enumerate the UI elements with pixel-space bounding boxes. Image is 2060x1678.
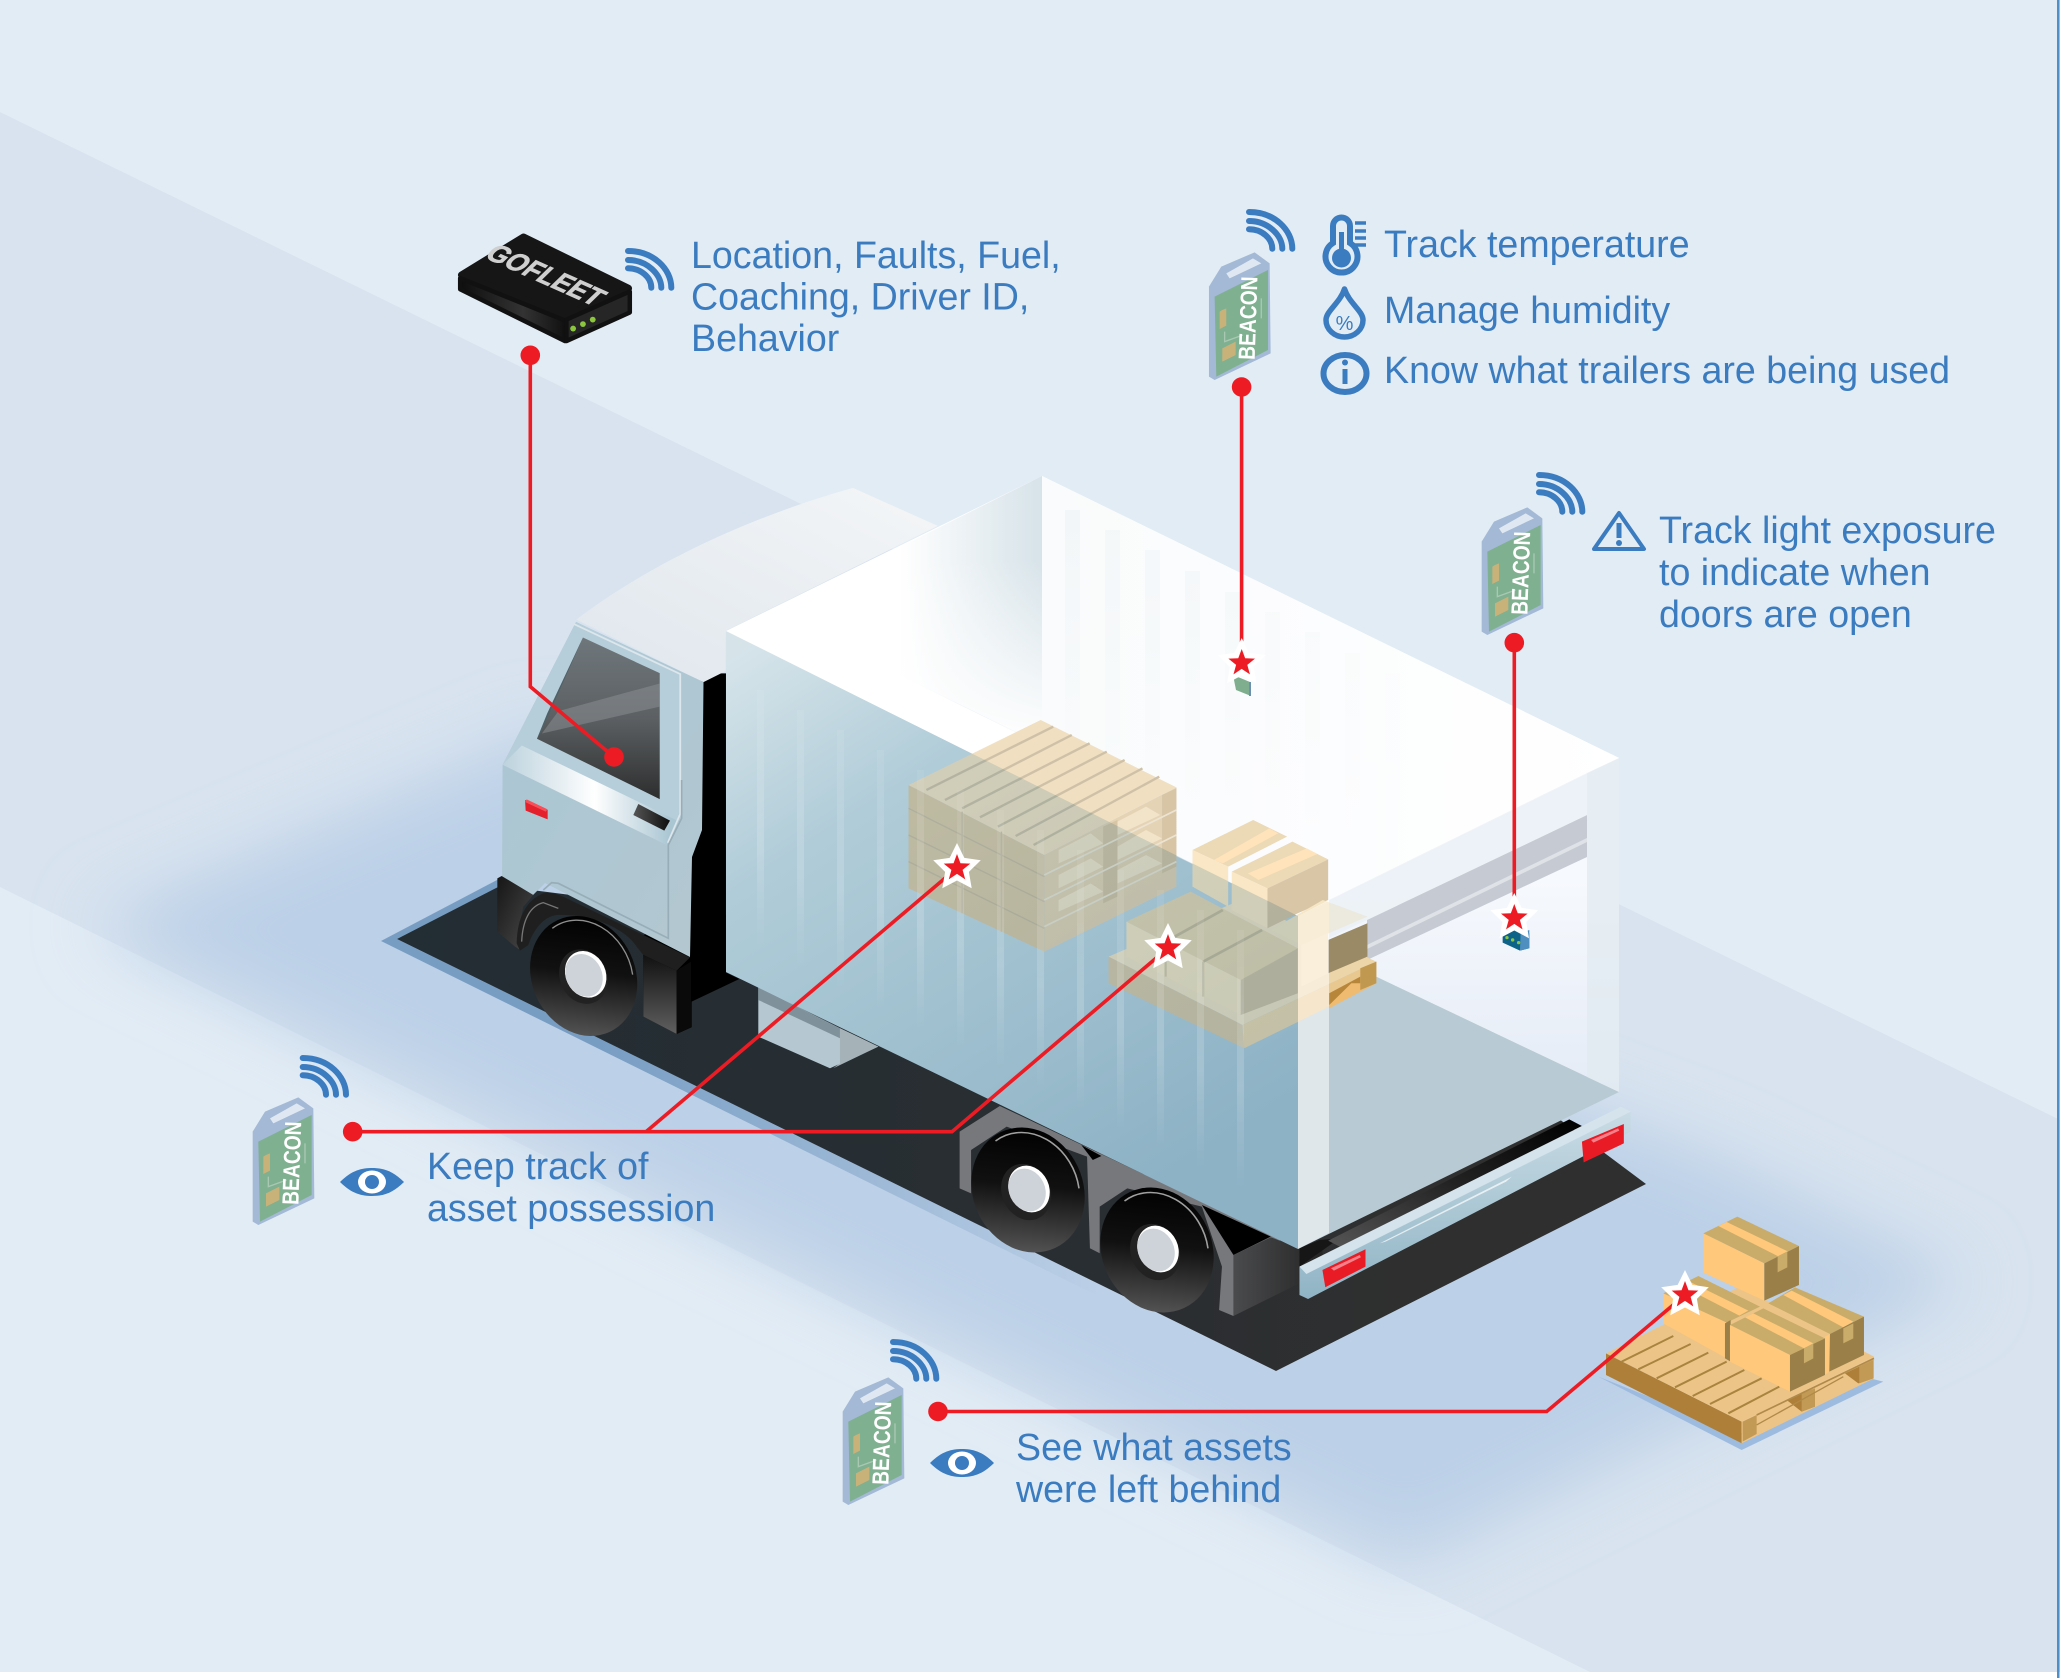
side wall stripes <box>757 690 1244 1190</box>
small device on door <box>1503 927 1529 951</box>
rear door frame <box>1298 758 1619 1249</box>
line: left behind <box>938 1295 1685 1412</box>
icon: GoFleet device <box>460 237 630 341</box>
icon: beacon left <box>253 1097 314 1225</box>
icon: beacon left: BEACON <box>277 1121 306 1205</box>
right edge line <box>2057 0 2060 1678</box>
text: device features: Behavior <box>691 317 839 359</box>
text: asset possession: Keep track of <box>427 1145 649 1187</box>
icon: wifi right beacon <box>1539 475 1582 512</box>
cargo box side wall <box>726 631 1298 1249</box>
ground under truck <box>381 880 1646 1371</box>
text: light exposure: to indicate when <box>1659 551 1931 593</box>
text: track temperature: Track temperature <box>1384 223 1690 265</box>
cab door details <box>525 780 682 938</box>
icon: beacon bottom <box>843 1377 904 1505</box>
icon: beacon top: BEACON <box>1234 276 1263 360</box>
text: trailers used: Know what trailers are being used <box>1384 349 1950 391</box>
back right box <box>1768 1287 1864 1375</box>
rear wheel one <box>951 1109 1105 1271</box>
star: door sensor <box>1491 893 1538 938</box>
line: asset possession to pallets <box>353 948 1168 1132</box>
cab body <box>502 622 704 957</box>
small beacon on wall <box>1233 675 1251 696</box>
top box <box>1703 1217 1799 1301</box>
icon: eye bottom <box>930 1449 994 1477</box>
side step under box <box>758 987 878 1068</box>
cab roof <box>576 488 938 682</box>
text: device features: Location, Faults, Fuel, <box>691 234 1061 276</box>
text: assets left behind: See what assets <box>1016 1426 1292 1468</box>
star markers <box>933 638 1709 1315</box>
icon: beacon bottom: BEACON <box>867 1401 896 1485</box>
icon: warning triangle <box>1594 513 1644 549</box>
lower left box <box>1663 1276 1760 1362</box>
icon: beacon right: BEACON <box>1506 531 1535 615</box>
text: device features: Coaching, Driver ID, <box>691 276 1029 318</box>
text: manage humidity: Manage humidity <box>1384 289 1670 331</box>
truck <box>381 476 1646 1371</box>
icon: wifi device <box>628 251 671 288</box>
box transparent roof overlay <box>726 476 1619 916</box>
line: device to cab <box>530 355 614 757</box>
icon: humidity drop: % <box>1336 313 1354 335</box>
icon: wifi top beacon <box>1249 212 1292 249</box>
text: light exposure: Track light exposure <box>1659 509 1996 551</box>
box transparent side overlay <box>726 631 1298 1249</box>
cab window and belt <box>503 622 680 845</box>
icon: info <box>1324 355 1366 392</box>
rear bumper <box>1299 1107 1631 1299</box>
pallet <box>1606 1287 1874 1443</box>
connector dots <box>343 346 1524 1421</box>
pallet with boxes inside box <box>1109 820 1376 1048</box>
cargo box interior <box>1042 476 1619 1249</box>
text: light exposure: doors are open <box>1659 593 1912 635</box>
icon: thermometer <box>1326 218 1366 273</box>
line: temperature beacon <box>1240 387 1243 661</box>
rear fender <box>960 1106 1322 1316</box>
truck ground shadow <box>92 730 1970 1563</box>
icon: beacon right <box>1482 507 1543 635</box>
front fender and wheel <box>497 876 691 1054</box>
star: boxes inside <box>1144 923 1192 968</box>
icon: wifi bottom beacon <box>893 1342 936 1379</box>
line: light beacon <box>1513 643 1516 916</box>
back wall ribs <box>1065 510 1400 863</box>
cargo box roof <box>726 476 1619 916</box>
line: asset possession branch <box>646 868 957 1132</box>
icon: GoFleet device: GOFLEET <box>479 239 613 311</box>
icon: eye left <box>340 1168 404 1196</box>
black gap between cab and box <box>643 673 739 1034</box>
pallet with boxes left behind <box>1598 1217 1883 1450</box>
icon: wifi left beacon <box>303 1058 346 1095</box>
star: left behind pallet <box>1661 1270 1709 1315</box>
icon: humidity drop <box>1326 289 1363 337</box>
text: asset possession: asset possession <box>427 1187 715 1229</box>
connector lines <box>353 355 1685 1412</box>
pallet shadow <box>1598 1377 1883 1450</box>
pallet stack inside box <box>909 720 1176 952</box>
star: wall beacon <box>1218 638 1265 683</box>
text: assets left behind: were left behind <box>1015 1468 1281 1510</box>
rear wheel two <box>1080 1169 1234 1331</box>
star: pallet stack <box>933 843 981 888</box>
front right box <box>1730 1308 1825 1392</box>
icon: beacon top <box>1209 252 1271 380</box>
